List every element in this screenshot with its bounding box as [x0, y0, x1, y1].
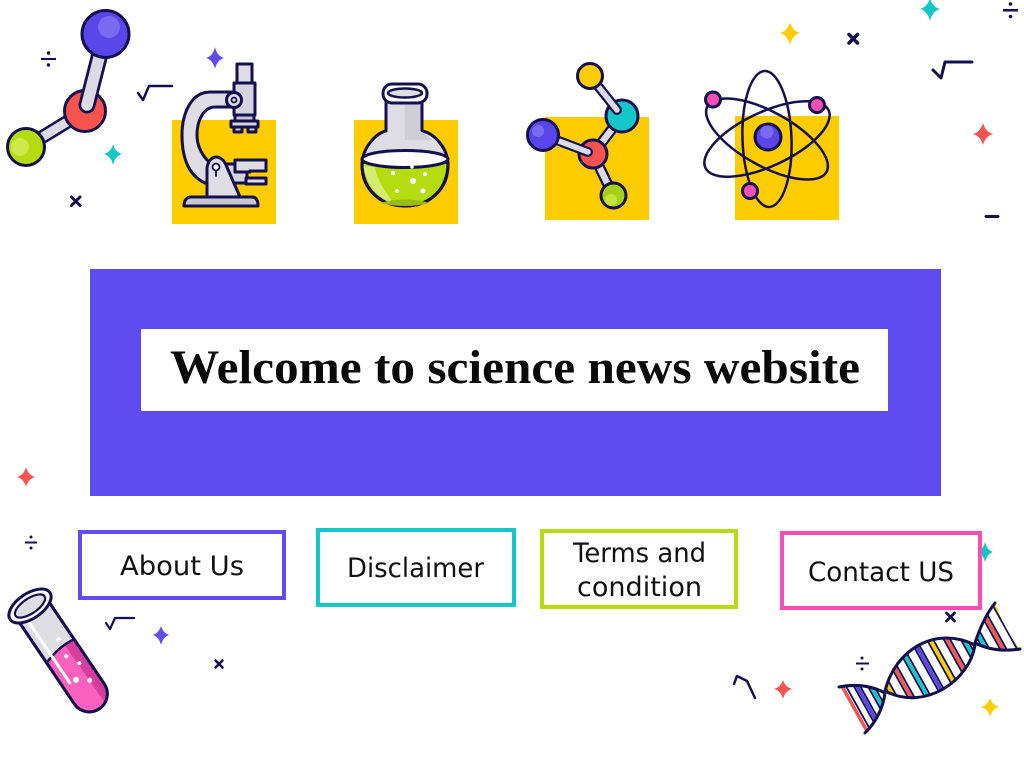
symbol: times bottom left [216, 660, 222, 668]
icon: atom [694, 70, 840, 220]
flask backing square [354, 120, 458, 224]
button: Terms and condition: condition [577, 572, 702, 603]
button: Contact US [782, 533, 980, 608]
symbol: divide left [25, 536, 37, 550]
button: Disclaimer [318, 530, 514, 605]
title: Welcome to science news website [170, 341, 860, 394]
microscope backing square [172, 120, 276, 224]
molecule backing square [545, 117, 649, 220]
banner panel [90, 269, 941, 496]
atom backing square [735, 116, 839, 220]
sparkle: purple top [206, 47, 224, 69]
symbol: root bottom right [734, 676, 755, 698]
symbol: times top right [849, 34, 858, 43]
symbol: divide top right [1003, 2, 1018, 18]
icon: molecule top left [8, 10, 129, 166]
button: Terms and condition [542, 531, 736, 607]
button: About Us: About Us [120, 551, 244, 582]
symbol: times top left [72, 197, 80, 206]
helix right lobe [978, 604, 1019, 649]
helix left lobe [841, 687, 882, 731]
icon: test tube [3, 582, 119, 722]
icon: molecule centre [528, 64, 649, 220]
button: About Us [80, 532, 284, 598]
sparkle: teal left [104, 144, 122, 165]
symbol: minus [986, 215, 998, 218]
symbol: root top left [138, 86, 172, 100]
title panel [141, 329, 888, 411]
icon: DNA helix [838, 601, 1022, 735]
symbol: root top right [933, 62, 972, 78]
sparkle: red right [973, 123, 993, 145]
symbol: root bottom left [106, 618, 134, 629]
sparkle: purple bottom left [153, 626, 169, 645]
sparkle: teal top right [920, 0, 940, 21]
banner [90, 269, 941, 496]
sparkle: yellow bottom right [981, 698, 999, 717]
sparkle: red bottom [774, 680, 792, 699]
sparkle: teal behind contact [977, 542, 993, 562]
sparkle: yellow top [780, 22, 800, 45]
icon: flask [354, 84, 458, 224]
helix middle lobe [886, 640, 973, 696]
button: Terms and condition: Terms and [572, 538, 706, 569]
sparkle: red left [17, 467, 35, 487]
icon: microscope [172, 64, 276, 224]
symbol: divide top left [41, 51, 56, 67]
symbol: times bottom right [946, 613, 954, 621]
button: Contact US: Contact US [808, 557, 954, 588]
button: Disclaimer: Disclaimer [347, 553, 484, 584]
symbol: divide bottom [856, 656, 869, 670]
